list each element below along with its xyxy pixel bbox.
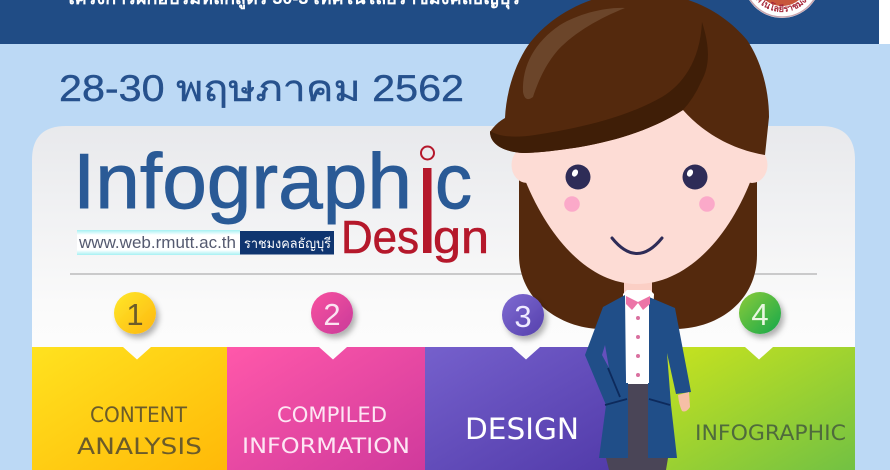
step labels: CONTENT [90,403,188,428]
collar [626,296,650,310]
band 4 [637,347,855,470]
step labels: DESIGN [465,412,579,446]
title: Infographic Design: Des [341,211,419,263]
header bar [0,0,890,44]
neck [624,275,652,303]
number badge 2 [311,292,353,334]
cheeks [564,196,715,212]
step labels: COMPILED [277,403,387,428]
face [525,110,751,284]
hair fringe shadow [490,22,708,153]
title: Infographic Design: gn [433,211,489,263]
title: Infographic Design [73,137,489,263]
main panel [32,126,855,470]
number badge 3 [502,294,544,336]
title: Infographic Design: Infograph [73,137,412,225]
trousers [606,380,668,470]
jacket arm gap [602,345,609,368]
step labels: INFOGRAPHIC [695,421,846,445]
step labels: INFORMATION [242,434,410,459]
ears [512,147,768,183]
hair top [490,0,769,155]
logo badge [749,0,815,18]
date heading: 28-30 พฤษภาคม 2562 [59,68,464,109]
url badge [77,230,334,255]
title: Infographic Design: c [435,137,472,225]
hair highlight [523,8,625,99]
hand [678,392,690,412]
step labels [77,403,846,460]
shirt [623,290,654,384]
number badge 4: 4 [751,297,769,332]
number badge 4 [739,292,781,334]
number badge 1: 1 [126,297,144,332]
buttons [636,316,640,377]
band 3 [425,347,637,470]
url badge: ราชมงคลธัญบุรี [244,236,331,252]
smile [612,238,662,254]
pocket lines [605,368,670,405]
band 1 [32,347,227,470]
jacket [585,295,691,458]
band 2 [227,347,425,470]
back hair [519,175,757,329]
number badge 2: 2 [323,297,341,332]
url badge: www.web.rmutt.ac.th [78,234,236,252]
character illustration [490,0,769,470]
step labels: ANALYSIS [77,435,202,460]
number badge 3: 3 [514,299,532,334]
step bands [32,347,855,470]
number badge 1 [114,292,156,334]
eyes [566,164,708,190]
